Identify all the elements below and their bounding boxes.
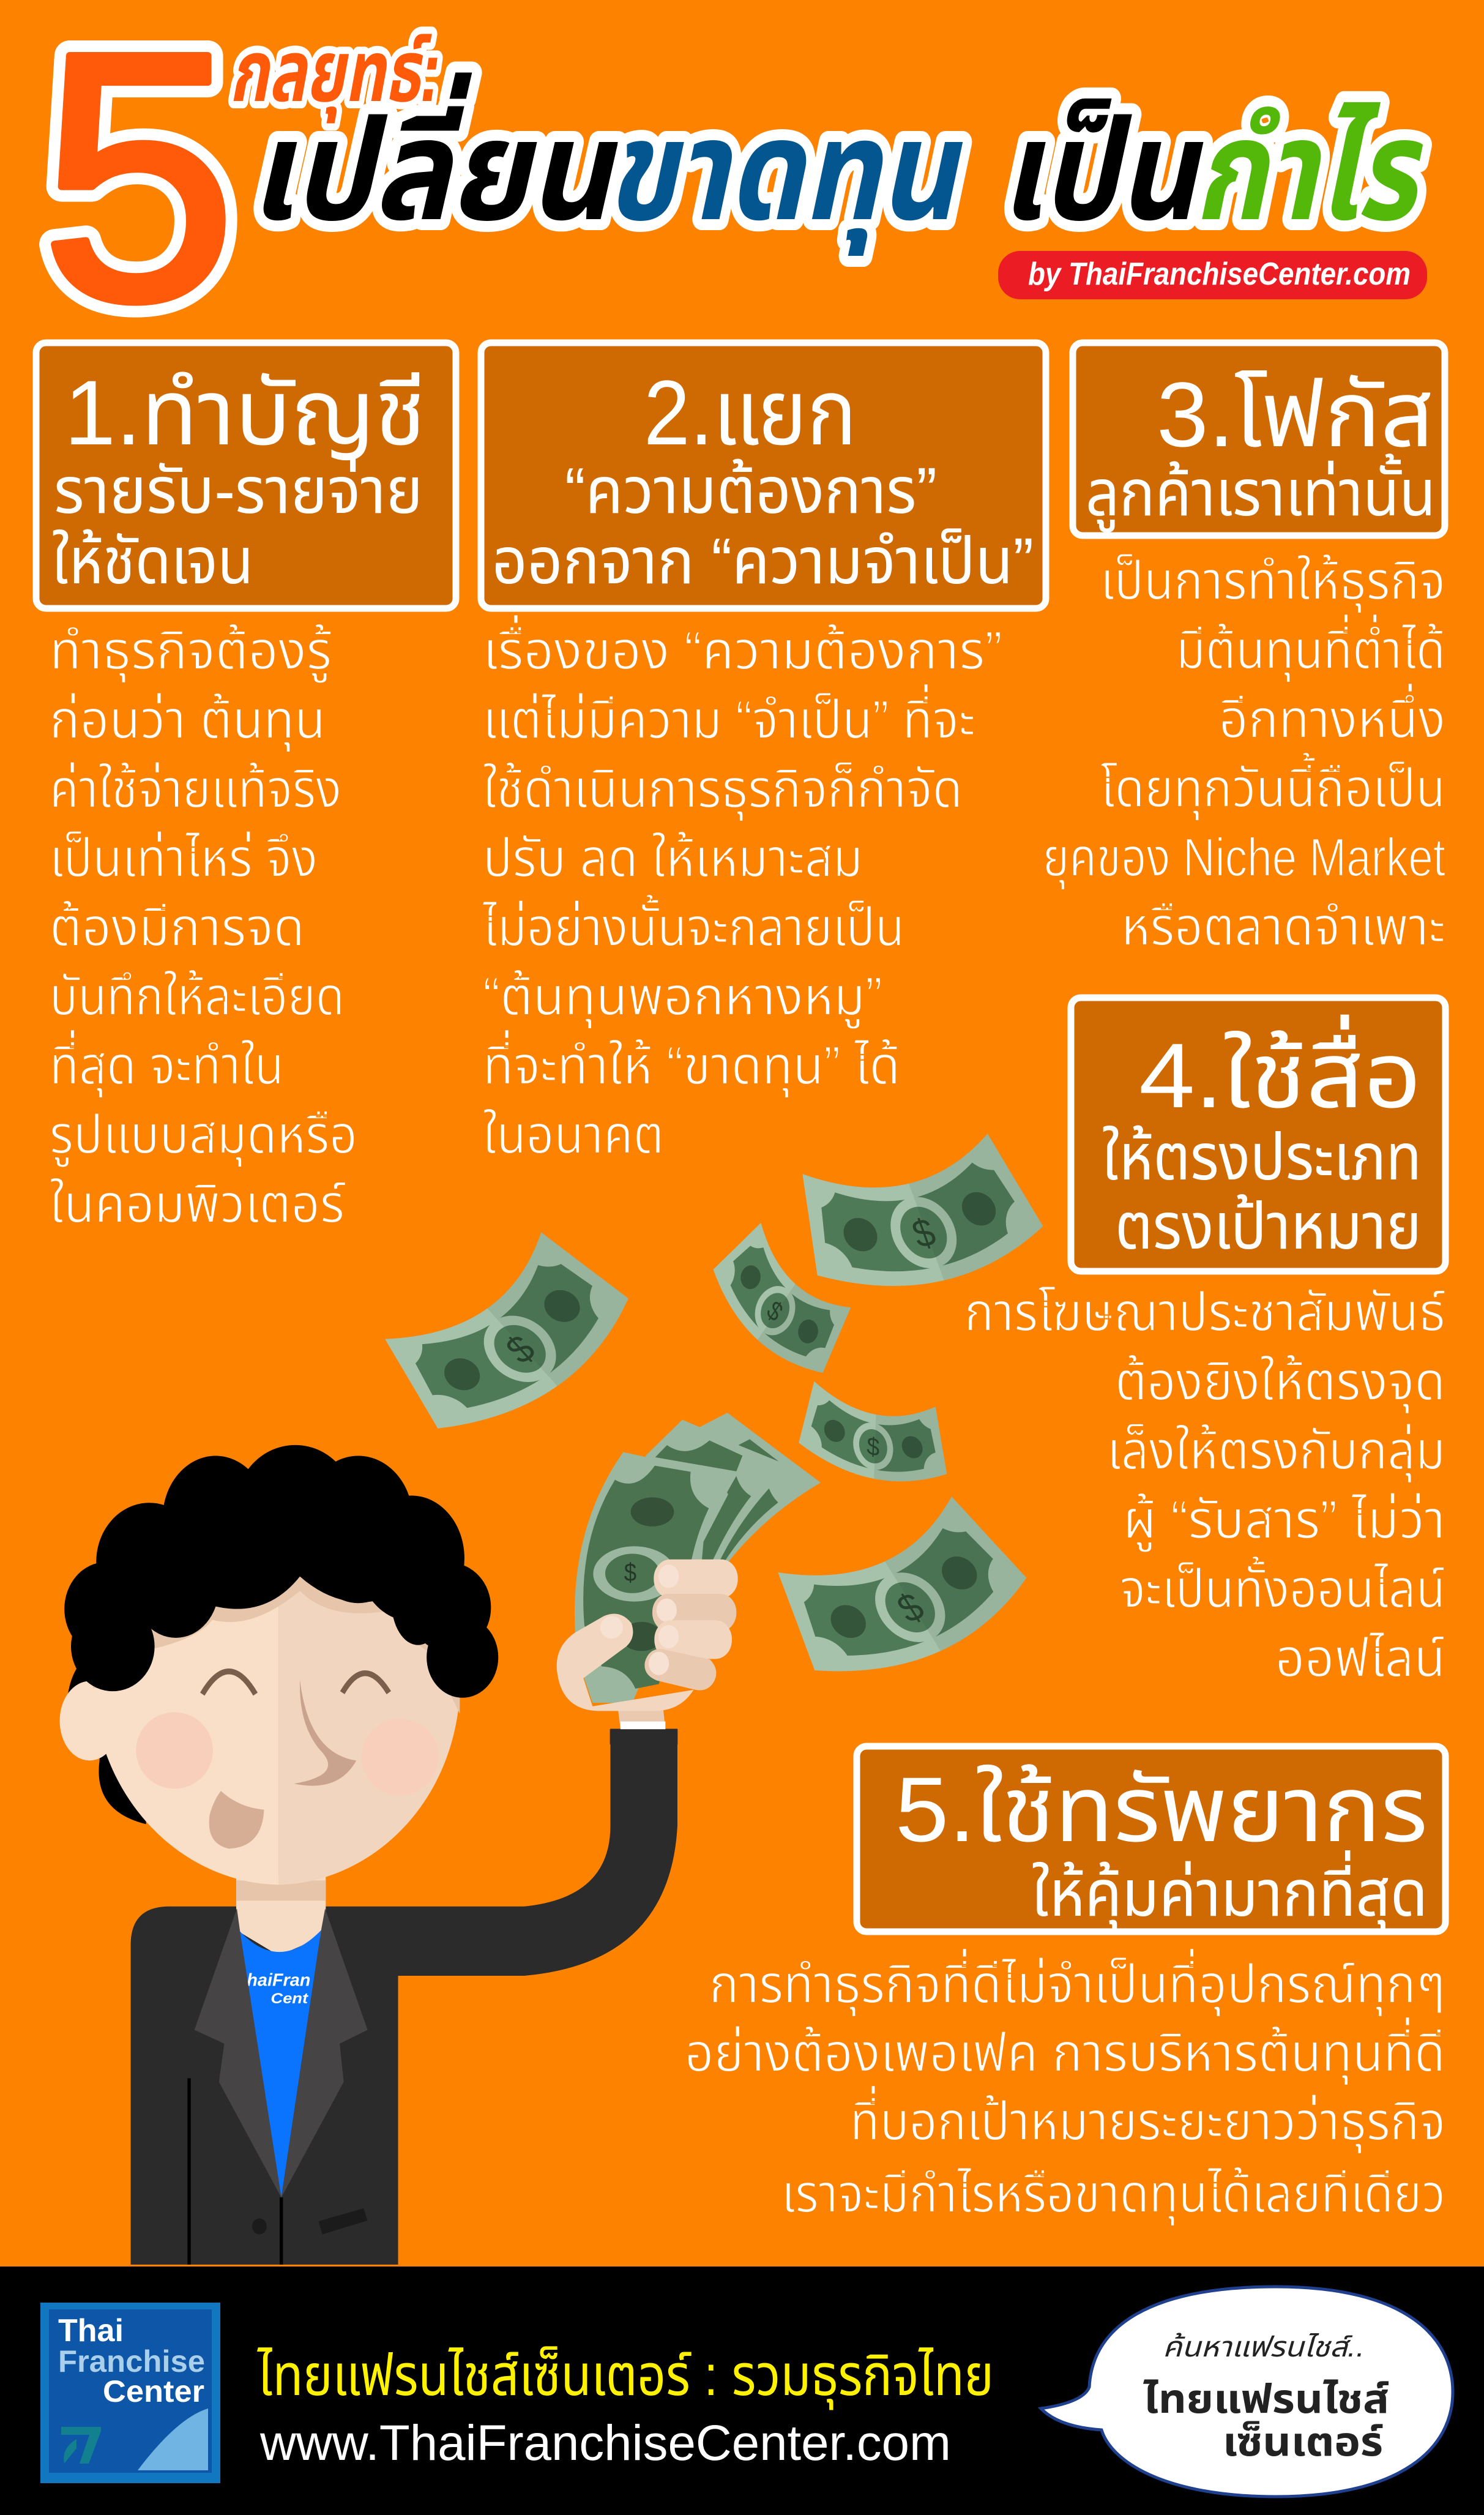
logo: Thai <box>58 2313 124 2349</box>
logo: Center <box>103 2374 204 2408</box>
panel: step 1 heading <box>36 343 456 608</box>
text block: step 4 body: ต้องยิงให้ตรงจุด <box>1115 1351 1445 1414</box>
text block: step 1 body: รูปแบบสมุดหรือ <box>50 1104 357 1167</box>
panel: step 5 heading <box>857 1746 1445 1933</box>
panel: step 2 heading: 2.แยก <box>644 361 857 464</box>
text block: step 3 body: มีต้นทุนที่ต่ำได้ <box>1176 614 1445 682</box>
shirt: Cent <box>270 1990 309 2006</box>
footer url: www.ThaiFranchiseCenter.com <box>259 2415 951 2471</box>
ear <box>60 1681 119 1760</box>
panel: step 4 heading: 4.ใช้สื่อ <box>1139 1014 1422 1127</box>
text block: step 4 body <box>964 1282 1445 1688</box>
text block: step 1 body: ในคอมพิวเตอร์ <box>50 1173 346 1234</box>
text block: step 5 body <box>685 1948 1445 2226</box>
text block: step 1 body: ค่าใช้จ่ายแท้จริง <box>50 758 341 819</box>
text block: step 1 body: ที่สุด จะทำใน <box>50 1030 284 1098</box>
back notes <box>646 1413 821 1564</box>
head <box>93 1522 278 1885</box>
face: cheeks <box>136 1712 213 1788</box>
speech bubble <box>1041 2287 1453 2497</box>
panel: step 2 heading: ออกจาก “ความจำเป็น” <box>492 525 1034 597</box>
text block: step 4 body: การโฆษณาประชาสัมพันธ์ <box>964 1282 1445 1342</box>
speech bubble: ค้นหาแฟรนไชส์.. <box>1163 2331 1365 2363</box>
illustration: hand holding money: $ <box>624 1558 636 1587</box>
illustration: flying banknotes <box>331 1101 1084 1725</box>
face: mouth <box>209 1791 264 1848</box>
text block: step 4 body: จะเป็นทั้งออนไลน์ <box>1120 1556 1445 1619</box>
text block: step 2 body: ไม่อย่างนั้นจะกลายเป็น <box>482 894 904 957</box>
text block: step 4 body: ผู้ “รับสาร” ไม่ว่า <box>1123 1489 1445 1552</box>
text block: step 1 body: บันทึกให้ละเอียด <box>50 966 345 1026</box>
panel: step 1 heading: ให้ชัดเจน <box>52 525 253 597</box>
illustration: flying banknotes: $ <box>498 1328 544 1372</box>
text block: step 2 body: “ต้นทุนพอกหางหมู” <box>483 966 882 1029</box>
fingers <box>654 1560 738 1598</box>
panel: step 5 heading: 5.ใช้ทรัพยากร <box>895 1758 1428 1861</box>
text block: step 4 body: เล็งให้ตรงกับกลุ่ม <box>1107 1420 1445 1483</box>
lapels <box>195 1908 282 2197</box>
panel: step 1 heading: รายรับ-รายจ่าย <box>54 455 423 527</box>
text block: step 1 body <box>50 620 357 1234</box>
title: main headline: ขาดทุน <box>606 92 963 256</box>
front note <box>575 1452 728 1703</box>
shirt: haiFran <box>247 1970 310 1990</box>
logo <box>40 2303 220 2483</box>
panel: step 2 heading: “ความต้องการ” <box>565 455 937 527</box>
text block: step 1 body: ต้องมีการจด <box>50 897 305 957</box>
jacket details <box>189 2079 282 2265</box>
logo: Franchise <box>58 2344 205 2379</box>
hair shadow <box>93 1537 460 1714</box>
shirt <box>239 1930 321 2197</box>
jacket and raised arm <box>131 1729 677 2265</box>
panel: step 3 heading: ลูกค้าเราเท่านั้น <box>1086 454 1436 533</box>
panel: step 3 heading: 3.โฟกัส <box>1157 363 1434 466</box>
text block: step 2 body: เรื่องของ “ความต้องการ” <box>483 615 1002 681</box>
text block: step 2 body <box>482 615 1002 1165</box>
thumb and palm <box>557 1614 693 1711</box>
byline pill: by ThaiFranchiseCenter.com <box>1028 256 1411 292</box>
text block: step 5 body: อย่างต้องเพอเฟค การบริหารต้นทุนที่ดี <box>685 2017 1445 2085</box>
illustration: flying banknotes: $ <box>762 1294 788 1328</box>
illustration: flying banknotes: $ <box>906 1211 941 1257</box>
panel: step 5 heading: ให้คุ้มค่ามากที่สุด <box>1032 1850 1428 1933</box>
illustration: businessman <box>60 1445 677 2265</box>
wrist and cuff <box>618 1710 665 1730</box>
speech bubble: เซ็นเตอร์ <box>1223 2419 1383 2464</box>
panel: step 4 heading <box>1071 998 1445 1271</box>
illustration: flying banknotes: $ <box>867 1432 880 1462</box>
text block: step 3 body: โดยทุกวันนี้ถือเป็น <box>1100 752 1445 821</box>
text block: step 2 body: แต่ไม่มีความ “จำเป็น” ที่จะ <box>483 684 975 750</box>
text block: step 3 body: อีกทางหนึ่ง <box>1219 683 1445 749</box>
title: subtitle กลยุทธ์: กลยุทธ์: <box>229 23 441 124</box>
panel: step 4 heading: ตรงเป้าหมาย <box>1115 1190 1422 1263</box>
face: eyebrows <box>203 1672 255 1694</box>
face: nose <box>294 1680 356 1786</box>
hair behind head <box>68 1649 152 1824</box>
footer tagline: ไทยแฟรนไชส์เซ็นเตอร์ : รวมธุรกิจไทย <box>256 2343 994 2410</box>
panel: step 4 heading: ให้ตรงประเภท <box>1102 1121 1422 1194</box>
title: main headline: เป็น <box>1001 92 1204 249</box>
text block: step 1 body: ทำธุรกิจต้องรู้ <box>50 620 332 683</box>
illustration: hand holding money <box>557 1413 821 1744</box>
text block: step 3 body: หรือตลาดจำเพาะ <box>1121 896 1445 957</box>
text block: step 2 body: ที่จะทำให้ “ขาดทุน” ได้ <box>483 1030 900 1098</box>
panel: step 1 heading: 1.ทำบัญชี <box>64 361 426 464</box>
text block: step 1 body: ก่อนว่า ต้นทุน <box>50 689 326 752</box>
title: main headline <box>250 72 1423 256</box>
panel: step 3 heading <box>1073 343 1445 536</box>
text block: step 2 body: ในอนาคต <box>483 1104 664 1165</box>
text block: step 4 body: ออฟไลน์ <box>1275 1627 1445 1688</box>
footer bar <box>0 2266 1484 2515</box>
hair <box>64 1445 498 1698</box>
illustration: flying banknotes: $ <box>889 1585 932 1631</box>
text block: step 2 body: ปรับ ลด ให้เหมาะสม <box>483 828 863 888</box>
text block: step 2 body: ใช้ดำเนินการธุรกิจก็กำจัด <box>483 758 963 821</box>
text block: step 1 body: เป็นเท่าไหร่ จึง <box>50 828 318 888</box>
neck <box>236 1876 326 1956</box>
panel: step 2 heading <box>481 343 1046 608</box>
text block: step 3 body: เป็นการทำให้ธุรกิจ <box>1100 550 1445 613</box>
text block: step 3 body <box>1043 550 1445 957</box>
byline pill <box>998 251 1427 299</box>
title: main headline: กำไร <box>1195 92 1423 249</box>
speech bubble: ไทยแฟรนไชส์ <box>1143 2376 1389 2421</box>
title: main headline: เปลี่ยน <box>250 72 618 249</box>
